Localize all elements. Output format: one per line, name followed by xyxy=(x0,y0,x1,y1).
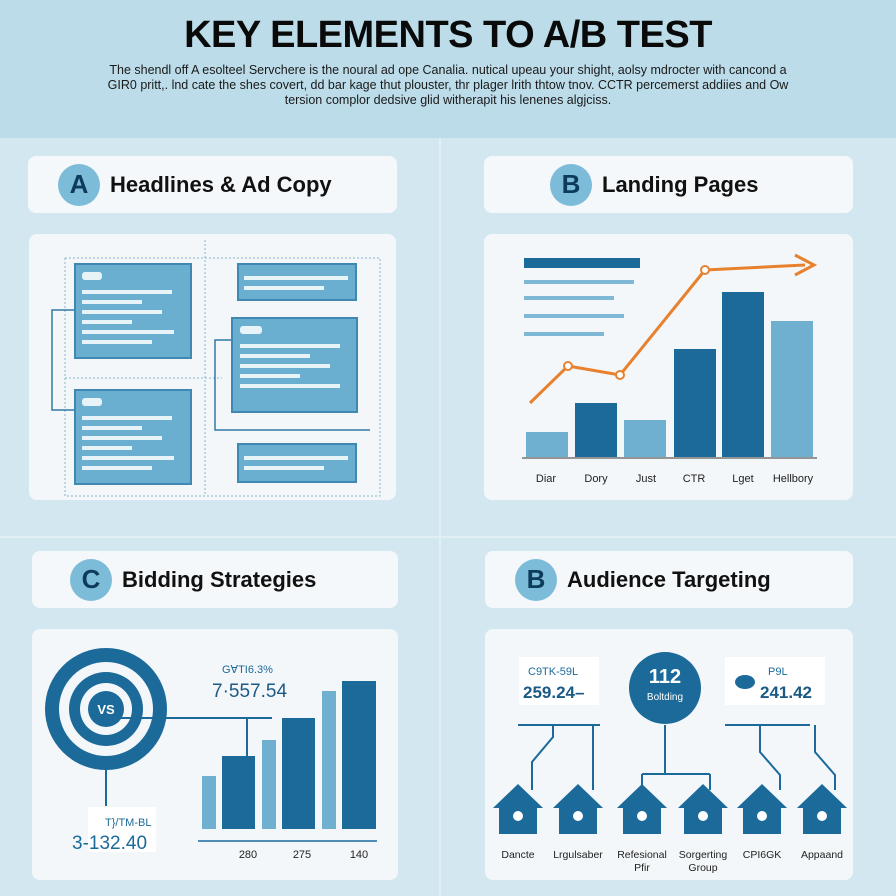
panel: headlines header: A xyxy=(70,169,88,199)
panel: bidding chart: 275 xyxy=(293,849,311,861)
panel: landing header xyxy=(484,156,853,213)
panel: headlines diagram xyxy=(29,234,396,500)
panel: bidding chart: 280 xyxy=(239,849,257,861)
panel: landing chart: Dory xyxy=(584,473,608,485)
panel: landing chart xyxy=(484,234,853,500)
panel: bidding chart: 7·557.54 xyxy=(212,681,287,702)
panel: landing chart: Hellbory xyxy=(773,473,814,485)
panel: audience tree: 112 xyxy=(649,666,681,688)
panel: landing header: Landing Pages xyxy=(602,172,758,196)
panel: audience tree: Refesional xyxy=(617,849,667,861)
panel: audience tree: Dancte xyxy=(501,849,535,861)
panel: bidding header xyxy=(32,551,398,608)
panel: bidding chart: 140 xyxy=(350,849,368,861)
panel: audience header: Audience Targeting xyxy=(567,566,771,592)
panel: audience tree: Sorgerting xyxy=(679,849,727,861)
panel: audience tree: Boltding xyxy=(647,692,683,703)
panel: landing chart: CTR xyxy=(683,473,705,485)
panel: bidding chart: GⱯTI6.3% xyxy=(222,664,273,676)
intro text: The shendl off A esolteel Servchere is the noural ad ope Canalia. nutical upeau your shight, aolsy mdrocter with cancond a GIR0 pritt,. lnd cate the shes covert, dd bar kage thut plouster, thr plager lrith thtow tnov. CCTR percemerst addiies and Ow tersion complor dedsive glid witherapit his lenenes algjciss. xyxy=(108,63,788,107)
panel: audience tree: Lrgulsaber xyxy=(553,849,603,861)
panel: landing chart: Diar xyxy=(536,473,556,485)
panel: landing header: B xyxy=(562,169,580,199)
panel: audience tree: P9L xyxy=(768,666,788,678)
panel: bidding chart: 3-132.40 xyxy=(72,833,147,854)
panel: bidding chart: T}/TM-BL xyxy=(105,817,151,829)
panel: audience tree xyxy=(485,629,853,880)
title: KEY ELEMENTS TO A/B TEST xyxy=(184,14,712,56)
panel: audience header: B xyxy=(527,564,545,594)
panel: audience tree: Appaand xyxy=(801,849,843,861)
panel: landing chart: Just xyxy=(636,473,656,485)
panel: audience tree: Group xyxy=(688,862,718,874)
panel: audience tree: CPI6GK xyxy=(743,849,781,861)
panel: bidding chart xyxy=(32,629,398,880)
panel: audience tree: Pfir xyxy=(634,862,650,874)
panel: audience tree: 259.24– xyxy=(523,683,584,702)
panel: bidding chart: VS xyxy=(97,702,115,717)
panel: audience header xyxy=(485,551,853,608)
header band xyxy=(0,0,896,138)
panel: audience tree: C9TK-59L xyxy=(528,666,578,678)
panel: headlines header xyxy=(28,156,397,213)
panel: bidding header: Bidding Strategies xyxy=(122,566,316,592)
panel: headlines header: Headlines & Ad Copy xyxy=(110,172,332,196)
panel: landing chart: Lget xyxy=(732,473,754,485)
panel: audience tree: 241.42 xyxy=(760,683,812,702)
panel: bidding header: C xyxy=(82,564,100,594)
